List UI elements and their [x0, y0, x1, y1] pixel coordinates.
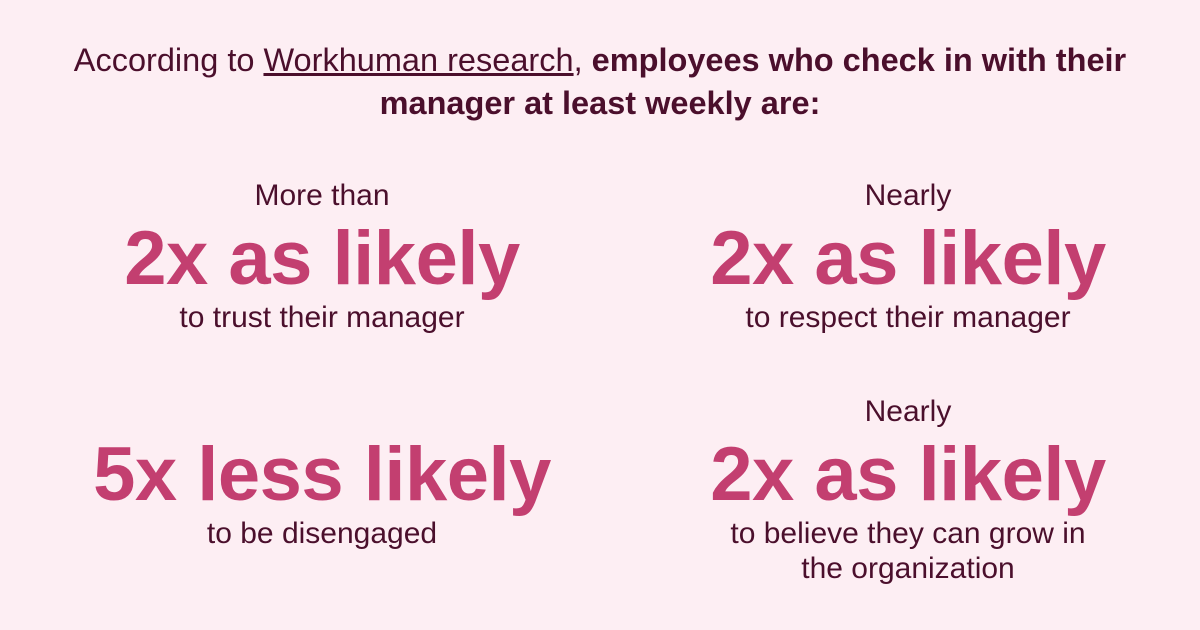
stat: disengaged: 5x less likely — [93, 432, 551, 517]
stat: respect: to respect their manager — [745, 301, 1071, 334]
stat: trust: to trust their manager — [179, 301, 465, 334]
title: manager at least weekly are: — [380, 85, 820, 121]
stat: respect: 2x as likely — [710, 216, 1106, 301]
stat: trust — [124, 179, 520, 334]
stat: disengaged: to be disengaged — [207, 517, 437, 550]
stat: grow — [710, 395, 1106, 585]
stat: grow: Nearly — [865, 395, 951, 428]
title: According to Workhuman research, employees who check in with their — [74, 42, 1126, 78]
stat: respect — [710, 179, 1106, 334]
stat: respect: Nearly — [865, 179, 951, 212]
stat: grow: to believe they can grow in — [730, 517, 1086, 550]
stat: trust: 2x as likely — [124, 216, 520, 301]
stat: grow: 2x as likely — [710, 432, 1106, 517]
stat: grow: the organization — [801, 552, 1015, 585]
stat: trust: More than — [254, 179, 390, 212]
title — [74, 42, 1126, 121]
